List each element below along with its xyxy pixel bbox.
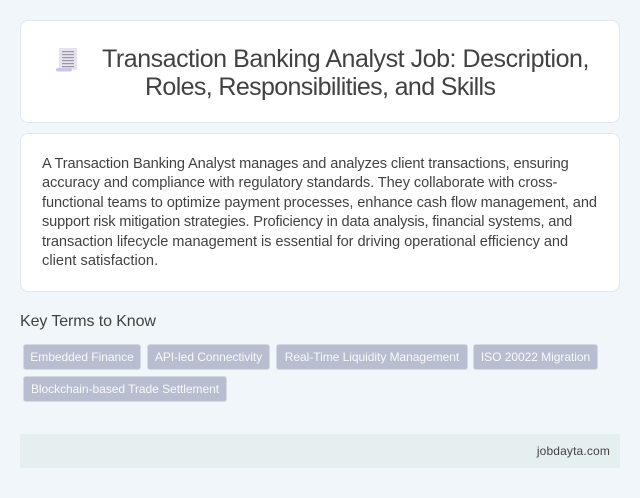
text block: description: functional teams to optimize payment processes, enhance cash flow management, and <box>42 195 597 211</box>
tag: api-led connectivity: API-led Connectivity <box>155 350 262 364</box>
tag: blockchain settlement <box>23 376 227 402</box>
tag: iso 20022 <box>473 344 598 370</box>
tag: embedded finance: Embedded Finance <box>30 350 134 364</box>
text block: description: A Transaction Banking Analyst manages and analyzes client transactions, ensuring <box>42 156 569 172</box>
title <box>102 45 589 101</box>
tag: real-time liquidity <box>276 344 468 370</box>
panel: title card <box>20 20 620 123</box>
text block: description: accuracy and compliance with regulatory standards. They collaborate with cross- <box>42 175 557 191</box>
tag: api-led connectivity <box>147 344 270 370</box>
text block: description <box>42 156 597 269</box>
tag: real-time liquidity: Real-Time Liquidity Management <box>285 350 459 364</box>
tag: iso 20022: ISO 20022 Migration <box>481 350 590 364</box>
tag: blockchain settlement: Blockchain-based Trade Settlement <box>31 382 219 396</box>
panel: description card <box>20 133 620 292</box>
heading: key terms: Key Terms to Know <box>20 313 156 330</box>
text block: description: transaction lifecycle management is essential for driving operational efficiency and <box>42 234 568 250</box>
text block: description: client satisfaction. <box>42 253 158 269</box>
footer source text: jobdayta.com <box>537 444 610 458</box>
title: Roles, Responsibilities, and Skills <box>145 73 495 101</box>
tag list <box>23 344 598 402</box>
footer bar <box>20 434 620 468</box>
icon: receipt document <box>56 48 77 72</box>
text block: description: support risk mitigation strategies. Proficiency in data analysis, financial systems, and <box>42 214 572 230</box>
tag: embedded finance <box>23 344 141 370</box>
title: Transaction Banking Analyst Job: Description, <box>102 45 589 73</box>
